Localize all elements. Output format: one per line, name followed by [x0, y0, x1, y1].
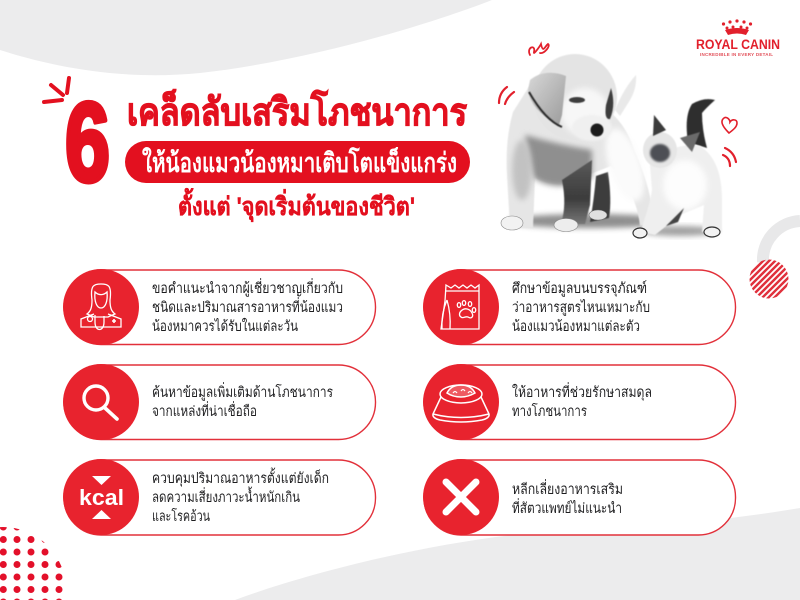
- background: hatched circle: [750, 260, 788, 298]
- heading line 2 pill: [125, 141, 470, 183]
- head: [643, 132, 677, 168]
- body: [640, 145, 722, 235]
- tip 6 text: หลีกเลี่ยงอาหารเสริม: [512, 479, 623, 498]
- tip 6 text: [512, 479, 623, 517]
- heading line 3: ตั้งแต่ 'จุดเริ่มต้นของชีวิต': [178, 187, 415, 223]
- nose: [590, 124, 604, 136]
- burst marks: [44, 78, 69, 102]
- tip 4 text: [512, 280, 650, 335]
- panel: tip 3 portion control: [63, 459, 376, 535]
- logo tagline: INCREDIBLE IN EVERY DETAIL: [700, 52, 773, 57]
- tip 4 text: ว่าอาหารสูตรไหนเหมาะกับ: [512, 298, 650, 316]
- belly shadow: [666, 208, 684, 226]
- logo wordmark: ROYAL CANIN: [696, 37, 780, 52]
- title: number six with burst: [44, 78, 110, 205]
- number 6: 6: [65, 80, 110, 205]
- icon: kcal: [79, 476, 124, 519]
- tip 3 text: และโรคอ้วน: [152, 507, 210, 525]
- tip 3 text: [152, 467, 329, 525]
- icon: veterinarian: [81, 284, 121, 330]
- tip 5 text: ทางโภชนาการ: [512, 402, 587, 420]
- tail: [615, 75, 636, 116]
- icon: crown: [722, 19, 752, 35]
- right ear: [680, 132, 700, 152]
- panel: tip 1 expert advice: [63, 269, 376, 345]
- photo: kitten: [633, 99, 722, 238]
- muzzle: [572, 115, 612, 141]
- chest shadow: [525, 135, 592, 186]
- tip 3 text: ลดความเสี่ยงภาวะน้ำหนักเกิน: [152, 486, 300, 506]
- decoration: left motion arcs: [499, 87, 514, 104]
- decoration: right motion arcs: [723, 148, 736, 166]
- icon: magnifying glass: [84, 386, 117, 419]
- icon: food bag with paw: [441, 285, 479, 329]
- tip 2 text: จากแหล่งที่น่าเชื่อถือ: [152, 401, 257, 420]
- body: [507, 85, 654, 228]
- left ear: [653, 115, 666, 136]
- rear leg far: [590, 172, 610, 222]
- decoration: heart: [722, 117, 737, 133]
- tip 1 text: ขอคำแนะนำจากผู้เชี่ยวชาญเกี่ยวกับ: [152, 278, 343, 297]
- right ear: [606, 88, 613, 119]
- tip 2 text: [152, 382, 333, 420]
- background: bottom grey swoosh: [235, 508, 800, 600]
- shadow: [642, 226, 718, 236]
- face highlight: [561, 88, 609, 136]
- tip 2 text: ค้นหาข้อมูลเพิ่มเติมด้านโภชนาการ: [152, 382, 333, 401]
- tip 3 text: ควบคุมปริมาณอาหารตั้งแต่ยังเด็ก: [152, 467, 329, 487]
- panel: tip 2 research: [63, 364, 376, 440]
- tip 1 text: ชนิดและปริมาณสารอาหารที่น้องแมว: [152, 297, 343, 316]
- heading line 1: เคล็ดลับเสริมโภชนาการ: [127, 89, 467, 134]
- background: dot pattern: [0, 524, 63, 600]
- tip 4 text: น้องแมวน้องหมาแต่ละตัว: [512, 318, 640, 335]
- icon: kcal: kcal: [79, 485, 124, 510]
- paws: [501, 216, 523, 230]
- paws: [633, 228, 647, 238]
- tip 6 text: ที่สัตวแพทย์ไม่แนะนำ: [512, 498, 622, 517]
- ground shadow: [508, 214, 672, 228]
- tip 1 text: น้องหมาควรได้รับในแต่ละวัน: [152, 317, 298, 335]
- tip 5 text: [512, 382, 652, 420]
- body highlight: [598, 124, 652, 206]
- body highlight: [663, 160, 707, 210]
- tip 1 text: [152, 278, 343, 335]
- head: [533, 54, 617, 140]
- face mask: [650, 144, 670, 162]
- panel: tip 4 read labels: [423, 269, 736, 345]
- tail: [687, 99, 715, 148]
- left body shading: [512, 140, 532, 200]
- panel: tip 5 balanced food: [423, 364, 736, 440]
- decoration: coil squiggle: [529, 44, 549, 55]
- background: top grey swoosh: [0, 0, 492, 75]
- left ear: [528, 73, 566, 125]
- photo: puppy: [501, 54, 672, 232]
- icon: food bowl: [433, 385, 489, 422]
- icon: cross: [446, 482, 476, 512]
- tip 4 text: ศึกษาข้อมูลบนบรรจุภัณฑ์: [512, 280, 647, 297]
- eye: [569, 97, 585, 103]
- panel: tip 6 avoid supplements: [423, 459, 736, 535]
- ear shadow line: [529, 92, 562, 127]
- logo: Royal Canin: [696, 19, 780, 57]
- front dark leg: [561, 160, 592, 224]
- heading line 2 pill: ให้น้องแมวน้องหมาเติบโตแข็งแกร่ง: [142, 145, 457, 178]
- tip 5 text: ให้อาหารที่ช่วยรักษาสมดุล: [512, 382, 652, 401]
- background: grey ring: [763, 221, 800, 262]
